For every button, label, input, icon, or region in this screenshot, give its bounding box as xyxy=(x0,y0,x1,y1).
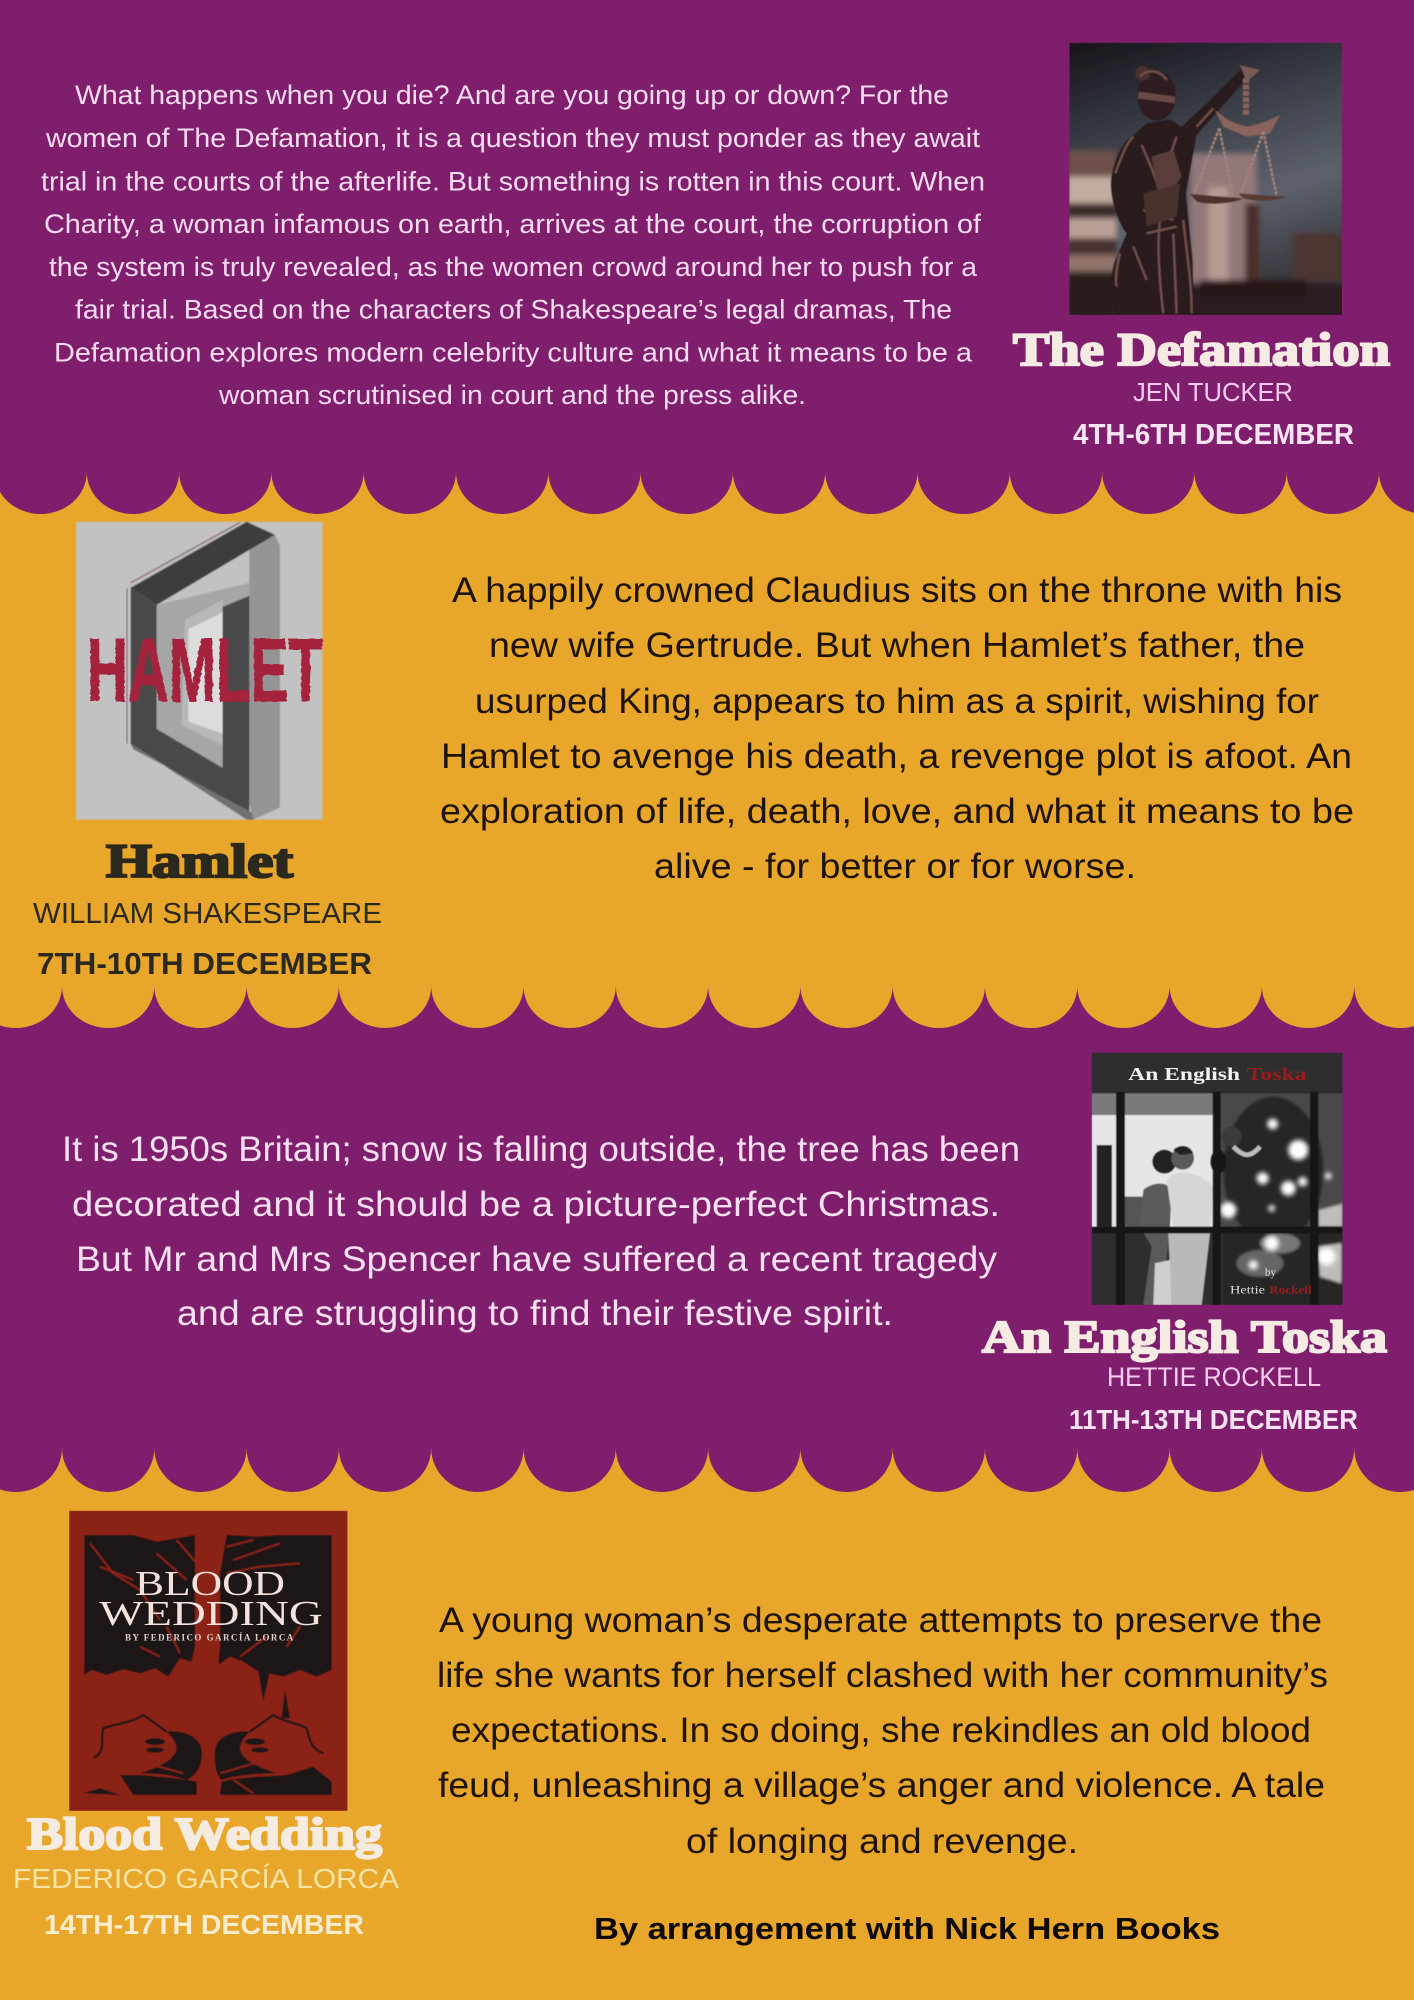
description: An English Toska: But Mr and Mrs Spencer have suffered a recent tragedy xyxy=(76,1240,998,1279)
poster lettering: Blood Wedding: BY FEDERICO GARCÍA LORCA xyxy=(125,1633,294,1643)
description: The Defamation: Charity, a woman infamous on earth, arrives at the court, the corruption of xyxy=(44,209,982,239)
description: Hamlet: A happily crowned Claudius sits on the throne with his xyxy=(452,571,1342,610)
description: Hamlet: alive - for better or for worse. xyxy=(654,847,1136,886)
title: The Defamation: The Defamation xyxy=(1013,324,1390,376)
description: The Defamation xyxy=(41,80,985,410)
author: Jen Tucker: JEN TUCKER xyxy=(1133,377,1293,407)
description: Blood Wedding xyxy=(437,1601,1328,1861)
panel: purple band 1 with scalloped edge xyxy=(0,0,1414,514)
poster lettering: An English Toska: An English xyxy=(1128,1064,1240,1084)
poster lettering: HAMLET: HAMLET xyxy=(87,621,323,721)
image: An English Toska poster, couple beside a Christmas tree xyxy=(1092,1053,1343,1305)
poster lettering: An English Toska xyxy=(1128,1064,1312,1296)
description: Blood Wedding: of longing and revenge. xyxy=(686,1822,1078,1861)
dates: 11th-13th December: 11TH-13TH DECEMBER xyxy=(1069,1404,1358,1435)
poster lettering: Blood Wedding: WEDDING xyxy=(99,1594,323,1633)
description: Hamlet: usurped King, appears to him as a spirit, wishing for xyxy=(475,682,1319,721)
description: An English Toska: decorated and it should be a picture-perfect Christmas. xyxy=(72,1185,1000,1224)
image: statue of Lady Justice holding scales xyxy=(1067,43,1347,320)
author: Hettie Rockell: HETTIE ROCKELL xyxy=(1107,1362,1321,1392)
credit line: By arrangement with Nick Hern Books xyxy=(594,1911,1220,1946)
panel: The Defamation xyxy=(41,43,1390,451)
dates: 14th-17th December: 14TH-17TH DECEMBER xyxy=(44,1909,364,1940)
author: Federico García Lorca: FEDERICO GARCÍA LORCA xyxy=(13,1863,399,1894)
description: The Defamation: trial in the courts of the afterlife. But something is rotten in this court. When xyxy=(41,166,985,196)
poster lettering: An English Toska: Rockell xyxy=(1269,1284,1312,1296)
description: An English Toska: It is 1950s Britain; snow is falling outside, the tree has been xyxy=(62,1130,1020,1169)
description: The Defamation: fair trial. Based on the characters of Shakespeare’s legal dramas, The xyxy=(75,294,952,324)
description: Blood Wedding: life she wants for herself clashed with her community’s xyxy=(437,1656,1328,1695)
poster lettering: An English Toska: by xyxy=(1265,1267,1276,1279)
description: An English Toska: and are struggling to find their festive spirit. xyxy=(177,1294,893,1333)
panel: An English Toska xyxy=(62,1053,1387,1435)
author: William Shakespeare: WILLIAM SHAKESPEARE xyxy=(33,898,382,930)
description: The Defamation: woman scrutinised in court and the press alike. xyxy=(218,380,806,410)
description: Hamlet: Hamlet to avenge his death, a revenge plot is afoot. An xyxy=(441,737,1352,776)
description: The Defamation: Defamation explores modern celebrity culture and what it means to be a xyxy=(54,338,972,368)
dates: 4th-6th December: 4TH-6TH DECEMBER xyxy=(1073,419,1354,451)
description: Blood Wedding: expectations. In so doing, she rekindles an old blood xyxy=(451,1711,1311,1750)
description: Blood Wedding: feud, unleashing a village’s anger and violence. A tale xyxy=(438,1766,1325,1805)
description: An English Toska xyxy=(62,1130,1020,1333)
panel: Blood Wedding xyxy=(13,1511,1328,1946)
panel: purple band 2 with scalloped edges xyxy=(0,986,1414,1492)
dates: 7th-10th December: 7TH-10TH DECEMBER xyxy=(37,946,372,981)
description: The Defamation: the system is truly revealed, as the women crowd around her to push for a xyxy=(49,252,977,282)
poster lettering: Blood Wedding: BLOOD xyxy=(135,1564,285,1603)
title: Hamlet: Hamlet xyxy=(106,835,293,888)
poster lettering: Blood Wedding xyxy=(99,1572,322,1640)
poster lettering: An English Toska: Hettie xyxy=(1230,1284,1265,1296)
image: Blood Wedding poster with tree and two faces xyxy=(69,1511,348,1811)
panel: Hamlet xyxy=(33,522,1354,981)
description: The Defamation: women of The Defamation, it is a question they must ponder as they await xyxy=(45,123,981,153)
image: Hamlet poster with impossible frame xyxy=(76,522,323,820)
description: Blood Wedding: A young woman’s desperate attempts to preserve the xyxy=(439,1601,1322,1640)
description: The Defamation: What happens when you die? And are you going up or down? For the xyxy=(75,80,949,110)
description: Hamlet xyxy=(440,571,1354,886)
description: Hamlet: exploration of life, death, love, and what it means to be xyxy=(440,792,1354,831)
poster lettering: An English Toska: Toska xyxy=(1247,1064,1307,1084)
title: An English Toska: An English Toska xyxy=(982,1311,1387,1362)
description: Hamlet: new wife Gertrude. But when Hamlet’s father, the xyxy=(489,626,1305,665)
title: Blood Wedding: Blood Wedding xyxy=(27,1809,383,1859)
